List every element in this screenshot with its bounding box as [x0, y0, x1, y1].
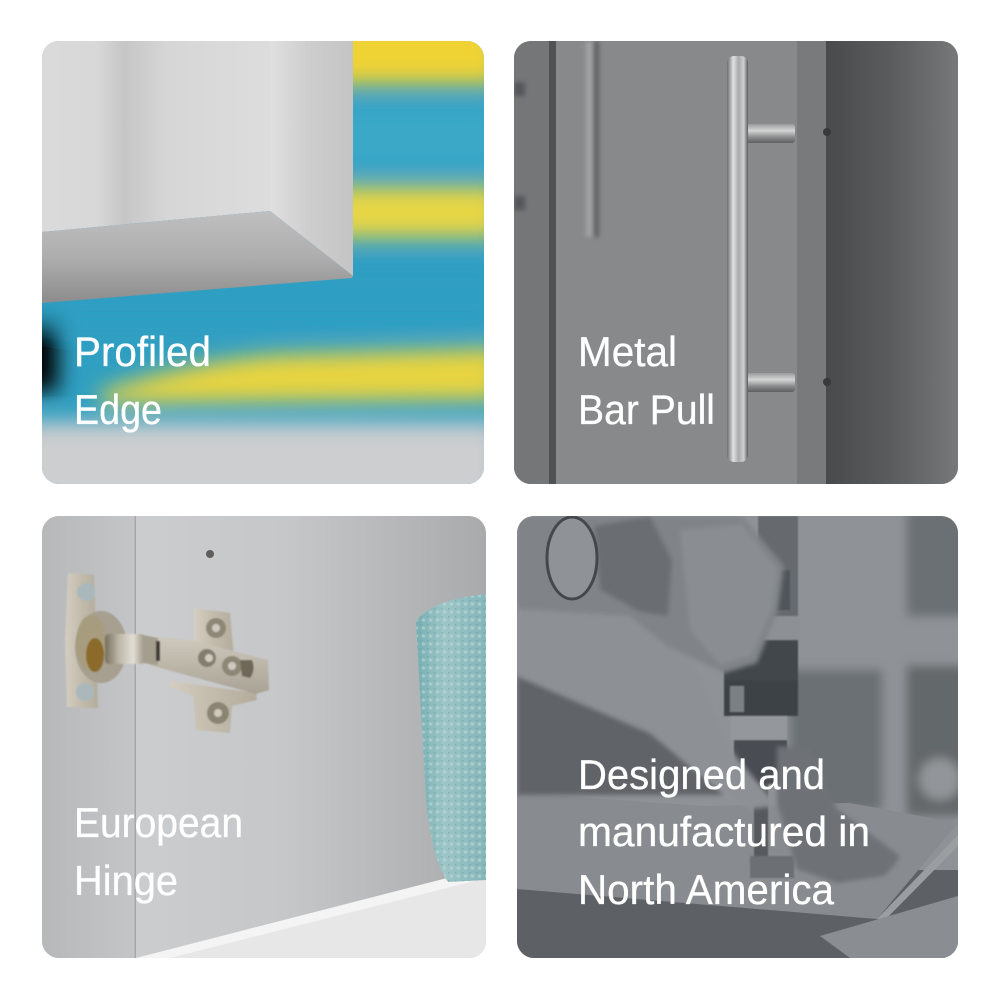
icon: teal glass — [416, 594, 486, 882]
panel: european hinge — [42, 516, 486, 958]
label: European Hinge: Hinge — [74, 857, 178, 904]
label: Designed and manufactured in North America: North America — [578, 866, 835, 913]
label: Metal Bar Pull: Metal — [578, 328, 677, 375]
panel: designed and manufactured — [517, 510, 967, 960]
icon: hinge — [65, 573, 269, 733]
hands and arm — [517, 516, 900, 883]
panel: metal bar pull — [514, 41, 958, 484]
workbench — [517, 793, 958, 960]
drill — [724, 516, 800, 878]
icon: bar pull handle — [727, 56, 831, 462]
blurred background stripes — [42, 41, 484, 484]
label: Metal Bar Pull: Bar Pull — [578, 386, 715, 433]
blurred workshop background — [790, 510, 967, 816]
label: Designed and manufactured in North America: Designed and — [578, 751, 825, 798]
blurred background pull — [514, 41, 599, 237]
label: Profiled Edge: Edge — [74, 386, 162, 433]
label: Designed and manufactured in North America: manufactured in — [578, 808, 870, 855]
label: Profiled Edge: Profiled — [74, 328, 211, 375]
label: European Hinge: European — [74, 799, 243, 846]
panel: profiled edge — [42, 41, 484, 484]
cabinet door corner — [42, 41, 353, 303]
